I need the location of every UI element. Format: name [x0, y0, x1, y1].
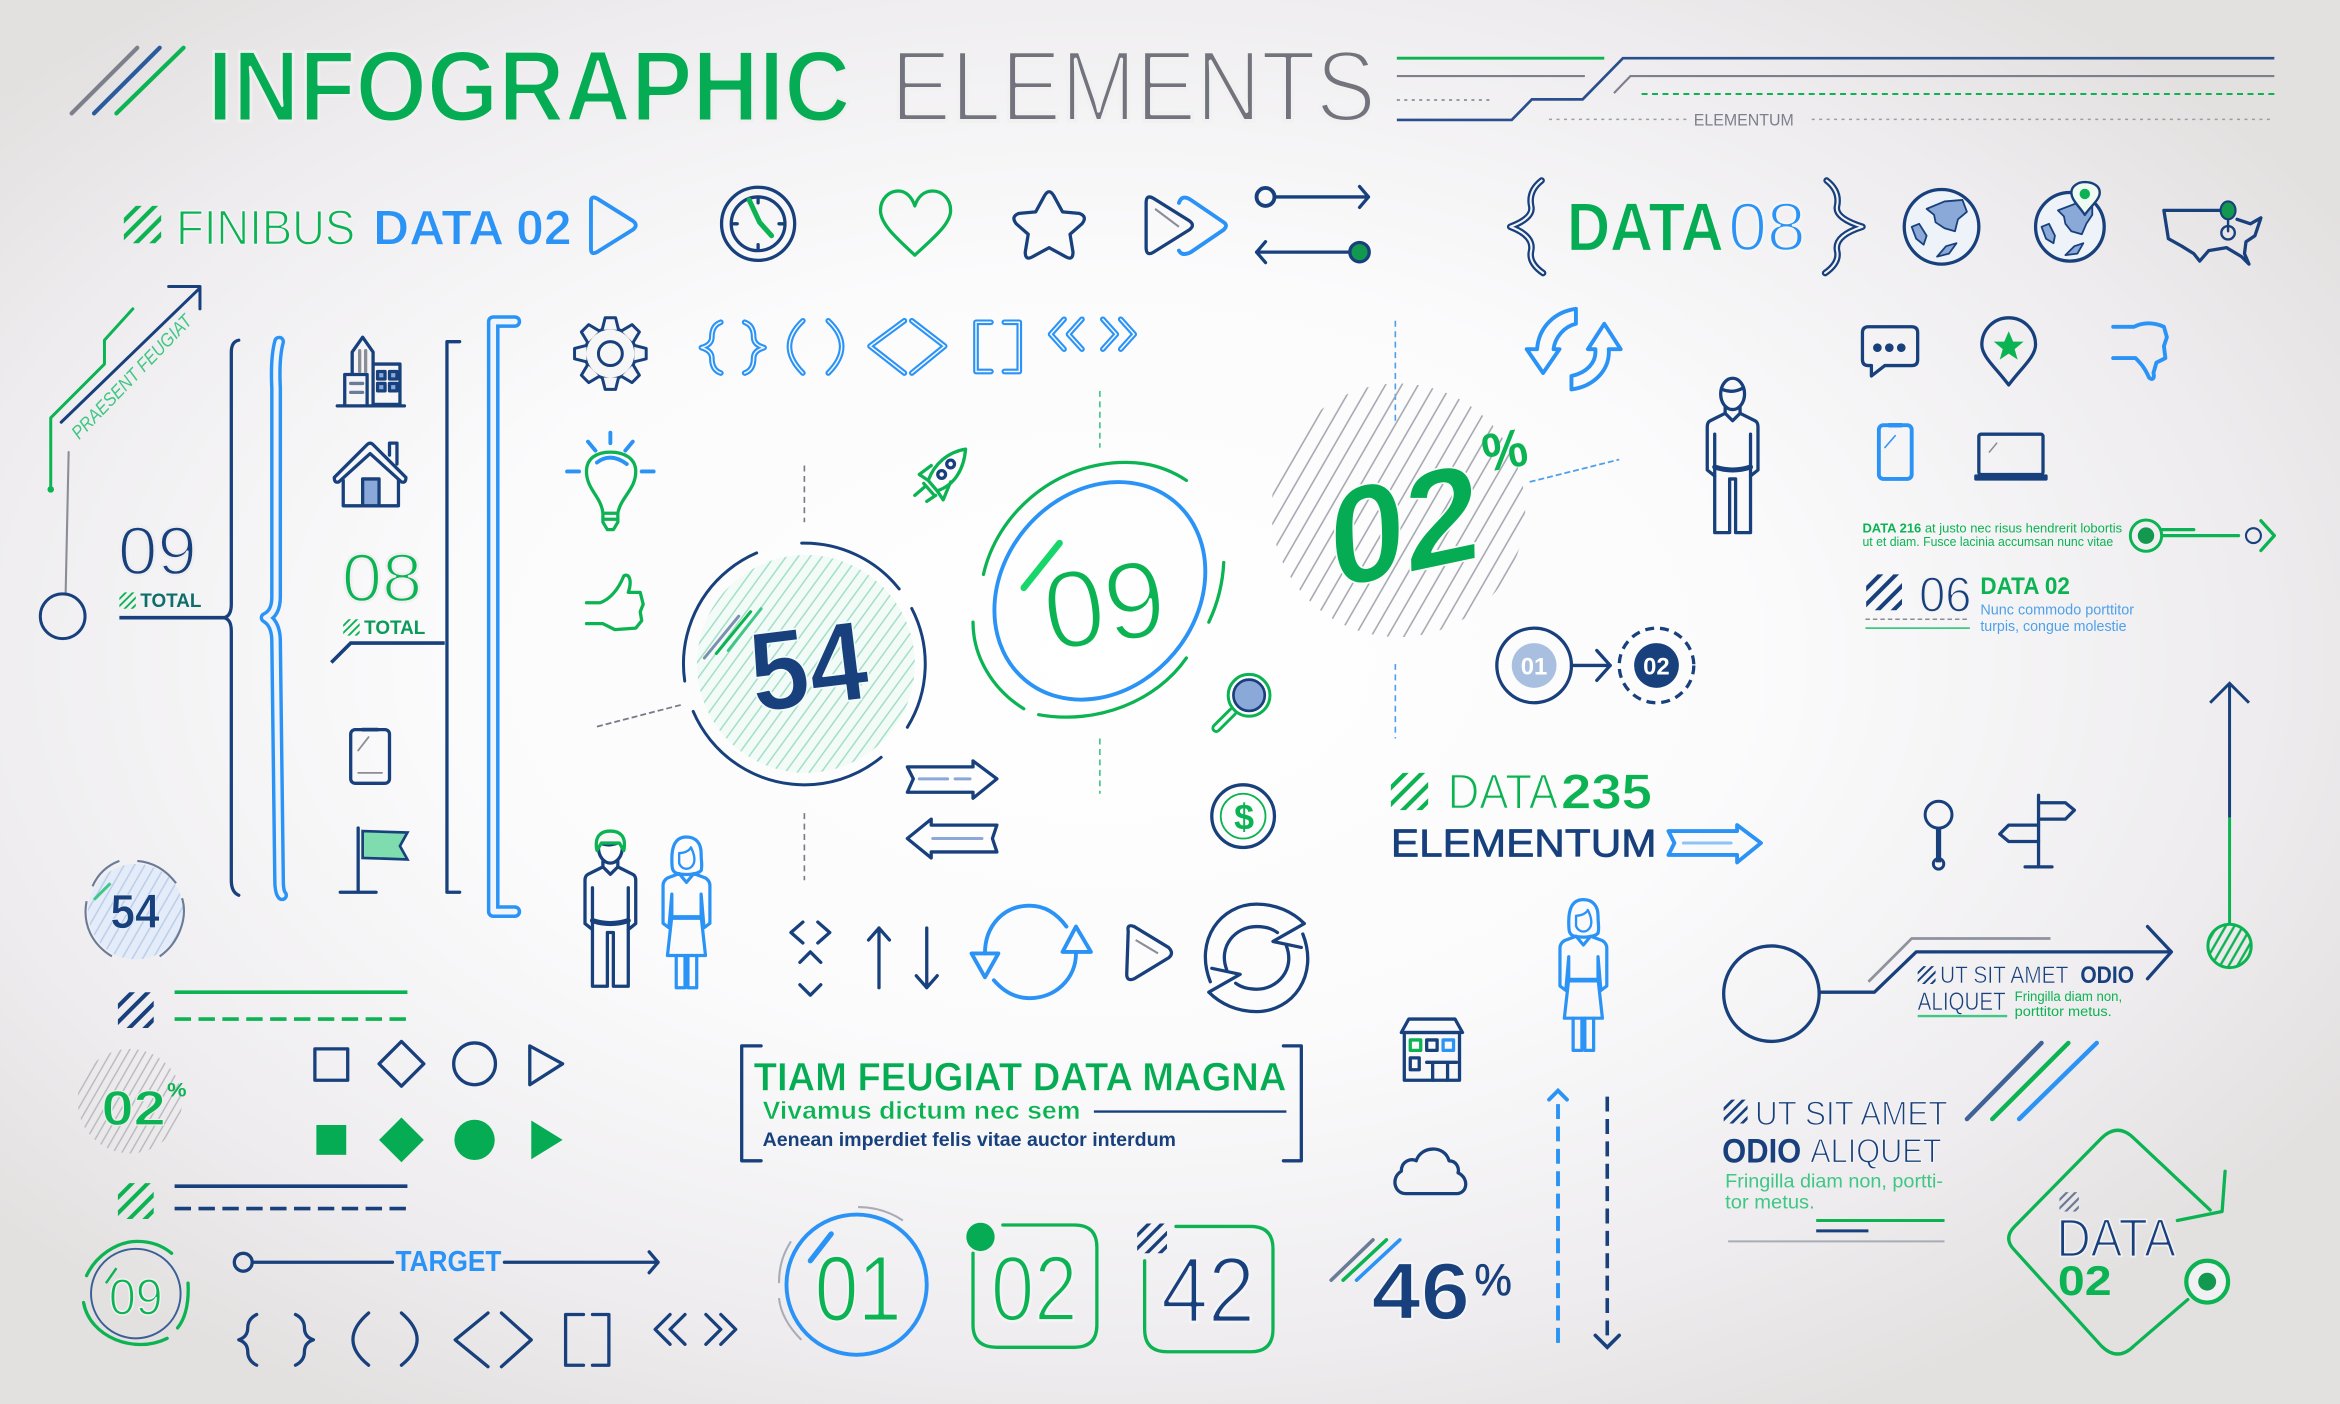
female figure left — [663, 837, 710, 988]
icon: gear — [575, 318, 646, 389]
chevrons set — [791, 922, 830, 995]
percent: % — [1478, 417, 1532, 484]
badge 02 — [966, 1223, 1097, 1347]
value: 09 — [109, 1268, 163, 1325]
gray stem — [66, 452, 69, 592]
target line — [234, 1246, 658, 1278]
navy brace — [224, 340, 239, 895]
icon: navy sync ring — [1205, 904, 1308, 1012]
data 02 block 06 — [1865, 568, 2134, 635]
value: 02 — [991, 1236, 1077, 1340]
badge 42 — [1137, 1223, 1273, 1352]
disc — [88, 864, 184, 959]
rotated label: PRAESENT FEUGIAT — [67, 309, 197, 443]
hatch — [119, 592, 136, 609]
outlined arrow left — [907, 819, 997, 858]
icon: laptop — [1976, 434, 2046, 479]
slash — [810, 1234, 831, 1261]
icon: chat bubble — [1862, 327, 1918, 376]
text line one: UT SIT AMET — [1940, 962, 2069, 989]
down arrow — [916, 928, 937, 988]
outlined arrow right — [907, 761, 997, 798]
step 01 — [1497, 628, 1571, 703]
data word: DATA — [2056, 1208, 2176, 1268]
label: TOTAL — [364, 617, 425, 639]
title — [72, 29, 1376, 143]
icon: globe with pin — [2036, 182, 2104, 261]
value: 42 — [1161, 1238, 1255, 1342]
target label: TARGET — [395, 1246, 502, 1278]
ring — [786, 1215, 927, 1355]
step 02 — [1619, 628, 1694, 703]
navy brackets row — [239, 1313, 736, 1367]
diagonal slashes — [1967, 1043, 2097, 1119]
start node — [234, 1253, 252, 1271]
outer arcs — [84, 1241, 188, 1345]
total 09 — [118, 512, 224, 618]
value: 54 — [742, 597, 875, 737]
navy bracket — [447, 342, 460, 892]
ut sit amet block — [1722, 1095, 1948, 1241]
badge 01 — [779, 1207, 927, 1355]
green text one: Fringilla diam non, portti- — [1725, 1171, 1943, 1193]
end circle — [40, 594, 85, 639]
blue bracket — [493, 322, 515, 912]
navy arrow — [1819, 927, 2171, 992]
bold word: ODIO — [1722, 1132, 1801, 1170]
icon: magnifier — [1216, 674, 1270, 728]
long up arrow with hatched ball — [2208, 683, 2251, 968]
frame — [1145, 1226, 1273, 1352]
circuit header lines — [1397, 58, 2274, 129]
icon: blue sync circle — [972, 906, 1091, 998]
gauge 02 percent — [1271, 383, 1619, 637]
icon: buildings — [337, 337, 404, 406]
steps 01 to 02 — [1497, 628, 1694, 703]
left circuit arrow — [40, 286, 200, 639]
label: TOTAL — [140, 590, 202, 612]
title word elements: ELEMENTS — [891, 29, 1376, 143]
slashes — [704, 609, 761, 658]
arrow head — [2177, 1171, 2225, 1220]
gray arcs — [779, 1207, 903, 1340]
rules — [1728, 1220, 1945, 1241]
gray trace — [1868, 938, 2050, 982]
number 02: 02 — [2058, 1257, 2112, 1304]
title word infographic: INFOGRAPHIC — [207, 29, 851, 143]
green line two: porttitor metus. — [2015, 1004, 2112, 1020]
hatch — [1137, 1223, 1167, 1253]
gauge 54 — [597, 494, 974, 834]
icon: sync arrows blue — [1527, 309, 1621, 389]
header label: ELEMENTUM — [1694, 111, 1794, 129]
outer green arcs — [973, 462, 1224, 717]
icon: globe — [1904, 189, 1979, 264]
hatch — [1391, 773, 1428, 810]
hatch — [118, 1183, 154, 1219]
hatch — [1918, 966, 1936, 984]
solid line — [175, 1185, 407, 1187]
leader — [1530, 460, 1619, 482]
value: 02 — [101, 1081, 166, 1136]
line two: ALIQUET — [1810, 1132, 1942, 1170]
icon: tablet — [351, 730, 390, 783]
blue brackets row — [701, 319, 1134, 373]
connector — [119, 617, 224, 619]
dashed line — [175, 1018, 407, 1020]
arrow — [1571, 651, 1610, 680]
hatch — [343, 619, 360, 636]
small gauge 09 — [84, 1241, 188, 1345]
play icon — [591, 197, 636, 253]
value: 54 — [110, 886, 160, 939]
dashed guide lines — [804, 321, 1395, 880]
icon: house — [334, 443, 406, 506]
left bracket — [742, 1046, 761, 1161]
icon: dollar coin: $ — [1234, 798, 1254, 838]
slash — [1024, 543, 1060, 588]
line one: UT SIT AMET — [1755, 1095, 1948, 1133]
dashed arrow up — [1549, 1091, 1567, 1343]
data word: DATA — [1567, 189, 1724, 266]
disc — [78, 1049, 182, 1153]
target node — [2186, 1261, 2228, 1303]
slash — [106, 1268, 116, 1283]
banner tiam feugiat — [742, 1046, 1301, 1161]
male figure left — [585, 831, 636, 986]
up arrow — [869, 928, 889, 988]
value: 02 — [1312, 436, 1494, 617]
hatched disc — [697, 555, 915, 773]
elementum word: ELEMENTUM — [1391, 822, 1657, 865]
connector — [331, 643, 445, 662]
target connector — [2130, 520, 2274, 551]
ring arcs — [86, 861, 184, 956]
caption line two: ut et diam. Fusce lacinia accumsan nunc vitae — [1862, 535, 2113, 549]
icon: phone blue — [1879, 425, 1912, 479]
data235 heading — [1391, 765, 1761, 865]
number 06: 06 — [1919, 568, 1971, 623]
label: DATA 02 — [1980, 573, 2070, 600]
headline: TIAM FEUGIAT DATA MAGNA — [754, 1055, 1286, 1100]
icon: dollar coin — [1212, 785, 1274, 847]
hatch — [1866, 574, 1902, 610]
data 216 caption — [1862, 522, 2122, 549]
green text two: tor metus. — [1725, 1192, 1815, 1214]
slashes — [1331, 1240, 1400, 1280]
dashed line — [175, 1207, 407, 1210]
icon: exchange arrows — [1257, 187, 1369, 263]
leader — [597, 704, 683, 727]
blue brace — [266, 342, 282, 895]
value: 09 — [1035, 536, 1174, 675]
blue arrow — [1668, 825, 1761, 862]
frame — [973, 1225, 1097, 1347]
hatch — [1724, 1100, 1748, 1123]
icon: light bulb — [567, 433, 654, 530]
subheading: Vivamus dictum nec sem — [763, 1097, 1080, 1125]
solid line — [175, 991, 407, 993]
icon: star pin — [1982, 318, 2036, 385]
body line: Aenean imperdiet felis vitae auctor interdum — [763, 1129, 1176, 1151]
icon: cloud — [1395, 1149, 1466, 1194]
icon: rocket — [915, 449, 966, 501]
key arrow callout — [1724, 927, 2171, 1041]
green line one: Fringilla diam non, — [2015, 989, 2122, 1005]
icon: signpost — [2000, 795, 2074, 867]
navy divider set — [118, 1183, 407, 1219]
small gauge 54 — [86, 861, 184, 959]
icon: thumbs down — [2113, 323, 2167, 379]
icon: usa map with pin — [2164, 201, 2261, 264]
green divider set — [118, 992, 407, 1028]
value: 01 — [815, 1236, 901, 1340]
step 02: 02 — [1643, 653, 1670, 680]
bold word: ODIO — [2080, 962, 2134, 989]
dot — [966, 1223, 995, 1251]
green trace — [51, 309, 133, 489]
left brace — [1510, 181, 1543, 273]
small gauge 02 percent — [78, 1049, 187, 1153]
hatch — [2059, 1192, 2079, 1212]
dashed arrow down — [1595, 1097, 1619, 1347]
inner blue ring — [951, 439, 1249, 742]
icon: heart — [880, 191, 951, 255]
data 02 text: DATA 02 — [373, 201, 572, 256]
female figure right — [1560, 900, 1607, 1050]
icon: store — [1401, 1019, 1462, 1080]
icon: flag — [340, 828, 407, 892]
icon: location pole — [1925, 801, 1952, 869]
percent: % — [1474, 1255, 1512, 1305]
icon: play — [1127, 926, 1171, 980]
total 08 — [331, 539, 445, 662]
data word: DATA — [1448, 765, 1558, 820]
text line two: ALIQUET — [1918, 988, 2006, 1016]
finibus heading — [124, 197, 636, 256]
diamond data 02 — [2009, 1130, 2228, 1354]
icon: thumbs up — [586, 575, 643, 630]
hatched disc — [1271, 383, 1525, 637]
filled shapes — [316, 1118, 563, 1162]
right bracket — [1283, 1046, 1301, 1161]
icon: double play — [1146, 197, 1226, 254]
finibus text: FINIBUS — [176, 201, 355, 256]
percent: % — [167, 1080, 187, 1102]
outline shapes — [315, 1041, 563, 1086]
value: 46 — [1371, 1247, 1470, 1337]
hatch — [124, 206, 161, 243]
number 08: 08 — [342, 539, 422, 616]
step 01: 01 — [1521, 653, 1547, 680]
navy arrow — [61, 286, 200, 422]
inner ring — [91, 1249, 181, 1338]
right brace — [1825, 181, 1862, 273]
outer arcs — [634, 494, 974, 834]
slash — [94, 883, 110, 900]
title slashes — [72, 48, 184, 113]
man figure — [1707, 378, 1758, 533]
diamond outline — [2009, 1130, 2210, 1354]
icon: star — [1014, 192, 1084, 258]
caption line one: DATA 216 at justo nec risus hendrerit lobortis — [1862, 522, 2122, 536]
data08 heading — [1510, 181, 1862, 273]
number 235: 235 — [1561, 765, 1652, 820]
description line two: turpis, congue molestie — [1980, 618, 2127, 635]
node circle — [1724, 946, 1819, 1041]
hatch — [118, 992, 154, 1028]
icon: clock — [722, 187, 795, 260]
number 09: 09 — [118, 512, 197, 589]
description line one: Nunc commodo porttitor — [1980, 602, 2134, 619]
number 08: 08 — [1728, 189, 1806, 266]
gauge 09 — [951, 439, 1249, 742]
stat 46 percent — [1331, 1240, 1512, 1337]
